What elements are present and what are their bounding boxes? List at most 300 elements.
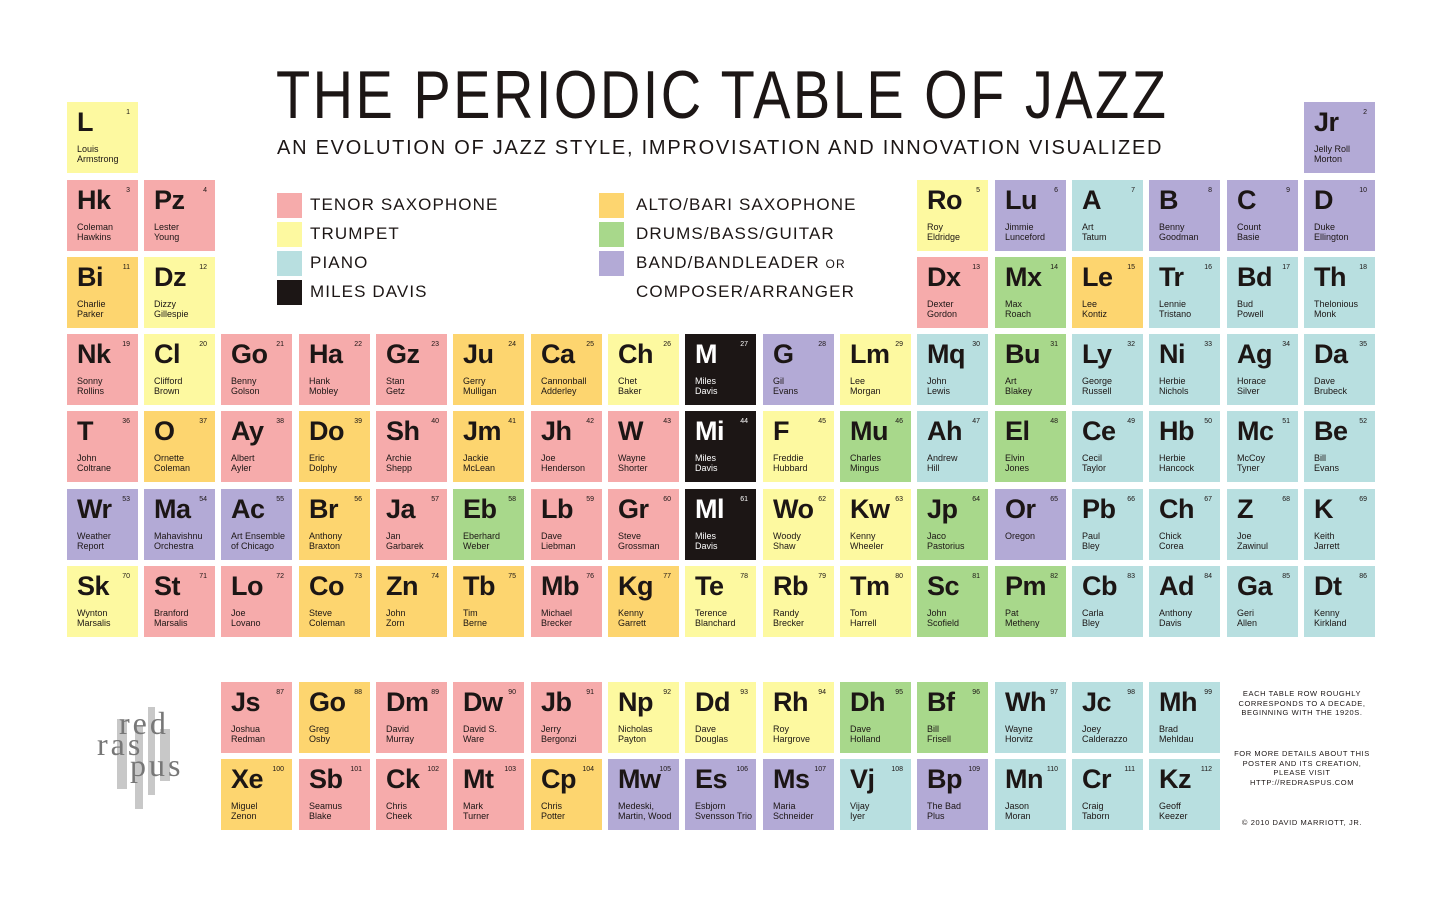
periodic table: Osby xyxy=(309,734,330,744)
periodic table: Clifford xyxy=(154,376,182,386)
periodic table: Sonny xyxy=(77,376,103,386)
periodic table: 37 xyxy=(199,418,207,425)
periodic table: 19 xyxy=(122,341,130,348)
periodic table: W xyxy=(618,416,643,446)
periodic table: Craig xyxy=(1082,801,1104,811)
periodic table: Mw xyxy=(618,764,660,794)
periodic table: 65 xyxy=(1050,496,1058,503)
periodic table: 85 xyxy=(1282,573,1290,580)
periodic table: Benny xyxy=(1159,222,1185,232)
periodic table: Mark xyxy=(463,801,483,811)
periodic table: Elvin xyxy=(1005,453,1025,463)
periodic table: 71 xyxy=(199,573,207,580)
periodic table: Mobley xyxy=(309,386,338,396)
periodic table: Herbie xyxy=(1159,453,1186,463)
periodic table: Steve xyxy=(618,531,641,541)
periodic table: Marsalis xyxy=(77,618,111,628)
periodic table: Esbjorn xyxy=(695,801,726,811)
periodic table: Lewis xyxy=(927,386,950,396)
periodic table: 14 xyxy=(1050,264,1058,271)
periodic table: Calderazzo xyxy=(1082,734,1128,744)
periodic table: Dave xyxy=(1314,376,1335,386)
periodic table: Tr xyxy=(1159,262,1184,292)
periodic table: 41 xyxy=(508,418,516,425)
periodic table: Le xyxy=(1082,262,1113,292)
periodic table: Ay xyxy=(231,416,264,446)
periodic table: Andrew xyxy=(927,453,958,463)
periodic table: of Chicago xyxy=(231,541,274,551)
periodic table: Dave xyxy=(850,724,871,734)
periodic table: Goodman xyxy=(1159,232,1199,242)
legend: ALTO/BARI SAXOPHONE xyxy=(636,195,857,214)
periodic table: 92 xyxy=(663,689,671,696)
periodic table: 6 xyxy=(1054,187,1058,194)
periodic table: Chet xyxy=(618,376,637,386)
periodic table: Th xyxy=(1314,262,1346,292)
periodic table: Stan xyxy=(386,376,405,386)
periodic table: 49 xyxy=(1127,418,1135,425)
periodic table: 106 xyxy=(736,766,748,773)
periodic table: Coltrane xyxy=(77,463,111,473)
periodic table: 70 xyxy=(122,573,130,580)
periodic table: 8 xyxy=(1208,187,1212,194)
periodic table: Art xyxy=(1005,376,1017,386)
periodic table: 75 xyxy=(508,573,516,580)
periodic table: 53 xyxy=(122,496,130,503)
periodic table: Sh xyxy=(386,416,420,446)
periodic table: 26 xyxy=(663,341,671,348)
periodic table: Morton xyxy=(1314,154,1342,164)
periodic table: Tyner xyxy=(1237,463,1260,473)
periodic table: Dexter xyxy=(927,299,954,309)
periodic table: Cannonball xyxy=(541,376,587,386)
note: decades: EACH TABLE ROW ROUGHLY CORRESPONDS TO A DECADE, BEGINNING WITH THE 1920S. xyxy=(1238,689,1366,717)
periodic table: Ml xyxy=(695,494,724,524)
periodic table: Dw xyxy=(463,687,502,717)
periodic table: Gz xyxy=(386,339,420,369)
periodic table: Jaco xyxy=(927,531,946,541)
periodic table: Do xyxy=(309,416,344,446)
periodic table: John xyxy=(927,376,947,386)
periodic table: Moran xyxy=(1005,811,1031,821)
periodic table: Tm xyxy=(850,571,890,601)
periodic table: 39 xyxy=(354,418,362,425)
periodic table: G xyxy=(773,339,794,369)
periodic table: 45 xyxy=(818,418,826,425)
periodic table: Herbie xyxy=(1159,376,1186,386)
periodic table: 89 xyxy=(431,689,439,696)
periodic table: 82 xyxy=(1050,573,1058,580)
periodic table: Jimmie xyxy=(1005,222,1034,232)
periodic table: Hubbard xyxy=(773,463,808,473)
periodic table: Mingus xyxy=(850,463,879,473)
periodic table: Br xyxy=(309,494,338,524)
periodic table: Joe xyxy=(1237,531,1252,541)
periodic table: 111 xyxy=(1124,766,1135,773)
periodic table: Brown xyxy=(154,386,180,396)
periodic table: O xyxy=(154,416,175,446)
periodic table: Liebman xyxy=(541,541,576,551)
periodic table: 1 xyxy=(126,109,130,116)
periodic table: Mx xyxy=(1005,262,1042,292)
periodic table: Shepp xyxy=(386,463,412,473)
periodic table: Hargrove xyxy=(773,734,810,744)
periodic table: Geoff xyxy=(1159,801,1181,811)
periodic table: 48 xyxy=(1050,418,1058,425)
periodic table: McCoy xyxy=(1237,453,1265,463)
periodic table: 90 xyxy=(508,689,516,696)
periodic table: Miles xyxy=(695,453,716,463)
periodic table: Randy xyxy=(773,608,799,618)
periodic table: Armstrong xyxy=(77,154,119,164)
periodic table: Lm xyxy=(850,339,890,369)
periodic table: 57 xyxy=(431,496,439,503)
periodic table: 15 xyxy=(1127,264,1135,271)
periodic table: Tom xyxy=(850,608,867,618)
periodic table: Jm xyxy=(463,416,501,446)
periodic table: Hancock xyxy=(1159,463,1194,473)
periodic table: Rb xyxy=(773,571,808,601)
periodic table: 11 xyxy=(123,264,130,271)
periodic table: Dt xyxy=(1314,571,1342,601)
periodic table: 38 xyxy=(276,418,284,425)
legend: COMPOSER/ARRANGER xyxy=(636,282,855,301)
periodic table: Ch xyxy=(1159,494,1194,524)
periodic table: Jc xyxy=(1082,687,1111,717)
periodic table: Basie xyxy=(1237,232,1260,242)
periodic table: Wr xyxy=(77,494,112,524)
periodic table: 96 xyxy=(972,689,980,696)
periodic table: Baker xyxy=(618,386,642,396)
periodic table: Da xyxy=(1314,339,1348,369)
periodic table: 88 xyxy=(354,689,362,696)
periodic table: 84 xyxy=(1204,573,1212,580)
periodic table: 33 xyxy=(1204,341,1212,348)
periodic table: Joey xyxy=(1082,724,1101,734)
periodic table: Monk xyxy=(1314,309,1336,319)
periodic table: Miles xyxy=(695,531,716,541)
periodic table: 60 xyxy=(663,496,671,503)
periodic table: Lunceford xyxy=(1005,232,1045,242)
periodic table: Harrell xyxy=(850,618,877,628)
periodic table: Chick xyxy=(1159,531,1182,541)
periodic table: 31 xyxy=(1050,341,1058,348)
periodic table: Joe xyxy=(231,608,246,618)
periodic table: Davis xyxy=(695,541,718,551)
periodic table: Tatum xyxy=(1082,232,1107,242)
periodic table: Seamus xyxy=(309,801,342,811)
periodic table: Taylor xyxy=(1082,463,1106,473)
periodic table: Svensson Trio xyxy=(695,811,752,821)
periodic table: Dm xyxy=(386,687,429,717)
periodic table: Ware xyxy=(463,734,484,744)
periodic table: Michael xyxy=(541,608,572,618)
periodic table: Lb xyxy=(541,494,573,524)
periodic table: 58 xyxy=(508,496,516,503)
periodic table: Mi xyxy=(695,416,724,446)
periodic table: Or xyxy=(1005,494,1036,524)
periodic table: Zenon xyxy=(231,811,257,821)
periodic table: Greg xyxy=(309,724,329,734)
periodic table: Rollins xyxy=(77,386,104,396)
periodic table: T xyxy=(77,416,93,446)
periodic table: Jackie xyxy=(463,453,489,463)
periodic table: 32 xyxy=(1127,341,1135,348)
periodic table: Ga xyxy=(1237,571,1272,601)
periodic table: Dave xyxy=(541,531,562,541)
periodic table: 40 xyxy=(431,418,439,425)
periodic table: Lee xyxy=(850,376,865,386)
periodic table: Hawkins xyxy=(77,232,111,242)
periodic table: Es xyxy=(695,764,727,794)
periodic table: 29 xyxy=(895,341,903,348)
periodic table: Ch xyxy=(618,339,653,369)
periodic table: Tb xyxy=(463,571,495,601)
periodic table: Russell xyxy=(1082,386,1112,396)
periodic table: 95 xyxy=(895,689,903,696)
periodic table: Dx xyxy=(927,262,961,292)
periodic table: Pb xyxy=(1082,494,1116,524)
periodic table: Powell xyxy=(1237,309,1264,319)
periodic table: Ad xyxy=(1159,571,1194,601)
legend xyxy=(277,193,857,305)
periodic table: 42 xyxy=(586,418,594,425)
title: THE PERIODIC TABLE OF JAZZ xyxy=(276,57,1168,133)
periodic table: Archie xyxy=(386,453,412,463)
periodic table: 5 xyxy=(976,187,980,194)
periodic table: Horace xyxy=(1237,376,1266,386)
periodic table: 59 xyxy=(586,496,594,503)
periodic table: 25 xyxy=(586,341,594,348)
periodic table: Ma xyxy=(154,494,191,524)
periodic table: Jh xyxy=(541,416,572,446)
periodic table: 34 xyxy=(1282,341,1290,348)
periodic table: 24 xyxy=(508,341,516,348)
periodic table: F xyxy=(773,416,789,446)
periodic table: Gordon xyxy=(927,309,957,319)
periodic table: Marsalis xyxy=(154,618,188,628)
periodic table: Jason xyxy=(1005,801,1029,811)
periodic table: 93 xyxy=(740,689,748,696)
periodic table: Bp xyxy=(927,764,962,794)
periodic table: Jan xyxy=(386,531,401,541)
periodic table: 46 xyxy=(895,418,903,425)
periodic table: 107 xyxy=(814,766,826,773)
periodic table: Be xyxy=(1314,416,1348,446)
periodic table: Lu xyxy=(1005,185,1037,215)
periodic table: Zawinul xyxy=(1237,541,1268,551)
periodic table: Horvitz xyxy=(1005,734,1033,744)
periodic table: Joe xyxy=(541,453,556,463)
periodic table: Miguel xyxy=(231,801,258,811)
periodic table: 86 xyxy=(1359,573,1367,580)
periodic table: Bd xyxy=(1237,262,1272,292)
periodic table: Np xyxy=(618,687,653,717)
periodic table: 56 xyxy=(354,496,362,503)
periodic table: Shaw xyxy=(773,541,796,551)
periodic table: Report xyxy=(77,541,104,551)
periodic table: Lennie xyxy=(1159,299,1186,309)
periodic table: 21 xyxy=(276,341,284,348)
periodic table: 7 xyxy=(1131,187,1135,194)
periodic table: Count xyxy=(1237,222,1261,232)
periodic table: Rh xyxy=(773,687,808,717)
periodic table: Ly xyxy=(1082,339,1112,369)
periodic table: Charlie xyxy=(77,299,106,309)
periodic table: Jb xyxy=(541,687,572,717)
periodic table: Gr xyxy=(618,494,649,524)
periodic table: 13 xyxy=(972,264,980,271)
periodic table: 30 xyxy=(972,341,980,348)
periodic table: 101 xyxy=(350,766,362,773)
periodic table: Zorn xyxy=(386,618,405,628)
periodic table: 2 xyxy=(1363,109,1367,116)
periodic table: 110 xyxy=(1047,766,1058,773)
periodic table: Art Ensemble xyxy=(231,531,285,541)
periodic table: Wh xyxy=(1005,687,1046,717)
periodic table: Jarrett xyxy=(1314,541,1340,551)
periodic table: Mn xyxy=(1005,764,1043,794)
periodic table: 112 xyxy=(1201,766,1212,773)
periodic table: Ca xyxy=(541,339,575,369)
periodic table: Vijay xyxy=(850,801,869,811)
periodic table: Freddie xyxy=(773,453,804,463)
periodic table: Mh xyxy=(1159,687,1197,717)
periodic table: Golson xyxy=(231,386,260,396)
periodic table: Ni xyxy=(1159,339,1185,369)
periodic table: Ju xyxy=(463,339,494,369)
periodic table: Payton xyxy=(618,734,646,744)
periodic table: 10 xyxy=(1359,187,1367,194)
periodic table: Anthony xyxy=(309,531,342,541)
periodic table: Tim xyxy=(463,608,478,618)
subtitle: AN EVOLUTION OF JAZZ STYLE, IMPROVISATION AND INNOVATION VISUALIZED xyxy=(277,137,1163,159)
periodic table: Cp xyxy=(541,764,576,794)
periodic table: Js xyxy=(231,687,260,717)
periodic table: 77 xyxy=(663,573,671,580)
legend: TRUMPET xyxy=(310,224,400,243)
legend: PIANO xyxy=(310,253,368,272)
periodic table: Ms xyxy=(773,764,810,794)
periodic table: Davis xyxy=(695,386,718,396)
periodic table: Getz xyxy=(386,386,405,396)
periodic table: Louis xyxy=(77,144,99,154)
periodic table: Murray xyxy=(386,734,414,744)
periodic table: Hb xyxy=(1159,416,1194,446)
periodic table: Orchestra xyxy=(154,541,194,551)
periodic table: 78 xyxy=(740,573,748,580)
periodic table: Jr xyxy=(1314,107,1339,137)
periodic table: Chris xyxy=(541,801,562,811)
periodic table: Bill xyxy=(1314,453,1326,463)
periodic table: Geri xyxy=(1237,608,1254,618)
periodic table: Blanchard xyxy=(695,618,736,628)
periodic table: Cl xyxy=(154,339,180,369)
periodic table: Paul xyxy=(1082,531,1100,541)
periodic table: 68 xyxy=(1282,496,1290,503)
periodic table: Kg xyxy=(618,571,653,601)
note: details: FOR MORE DETAILS ABOUT THIS POSTER AND ITS CREATION, PLEASE VISIT HTTP://REDRASPUS.COM xyxy=(1234,749,1370,786)
periodic table: Kirkland xyxy=(1314,618,1347,628)
periodic table: Pat xyxy=(1005,608,1019,618)
periodic table: Jp xyxy=(927,494,958,524)
periodic table: Weber xyxy=(463,541,489,551)
periodic table: Roy xyxy=(773,724,789,734)
periodic table: Davis xyxy=(695,463,718,473)
periodic table: Thelonious xyxy=(1314,299,1358,309)
periodic table: Pz xyxy=(154,185,185,215)
periodic table: 12 xyxy=(199,264,207,271)
periodic table: Eberhard xyxy=(463,531,500,541)
periodic table: 4 xyxy=(203,187,207,194)
periodic table: 69 xyxy=(1359,496,1367,503)
periodic table: Vj xyxy=(850,764,875,794)
periodic table: Grossman xyxy=(618,541,660,551)
periodic table: John xyxy=(927,608,947,618)
periodic table: Dave xyxy=(695,724,716,734)
periodic table: B xyxy=(1159,185,1178,215)
periodic table: Dolphy xyxy=(309,463,337,473)
periodic table: Gil xyxy=(773,376,784,386)
periodic table: 54 xyxy=(199,496,207,503)
periodic table: Eb xyxy=(463,494,497,524)
periodic table: 55 xyxy=(276,496,284,503)
periodic table: Joshua xyxy=(231,724,260,734)
periodic table: Adderley xyxy=(541,386,577,396)
periodic table: Brad xyxy=(1159,724,1178,734)
periodic table: Wayne xyxy=(618,453,646,463)
periodic table: Shorter xyxy=(618,463,648,473)
periodic table: Duke xyxy=(1314,222,1335,232)
periodic table: 18 xyxy=(1359,264,1367,271)
periodic table: Ac xyxy=(231,494,265,524)
periodic table: Sk xyxy=(77,571,109,601)
periodic table: 99 xyxy=(1204,689,1212,696)
periodic table: Kenny xyxy=(618,608,644,618)
periodic table: Zn xyxy=(386,571,418,601)
periodic table: 73 xyxy=(354,573,362,580)
periodic table: Miles xyxy=(695,376,716,386)
periodic table: Nichols xyxy=(1159,386,1189,396)
periodic table: 62 xyxy=(818,496,826,503)
periodic table: Coleman xyxy=(309,618,345,628)
periodic table: Corea xyxy=(1159,541,1184,551)
periodic table: Bu xyxy=(1005,339,1040,369)
periodic table: 22 xyxy=(354,341,362,348)
periodic table: Redman xyxy=(231,734,265,744)
periodic table: C xyxy=(1237,185,1256,215)
periodic table: Ellington xyxy=(1314,232,1349,242)
periodic table: Lee xyxy=(1082,299,1097,309)
periodic table: L xyxy=(77,107,93,137)
periodic table: Coleman xyxy=(154,463,190,473)
periodic table: Mq xyxy=(927,339,965,369)
periodic table: Wayne xyxy=(1005,724,1033,734)
periodic table: 83 xyxy=(1127,573,1135,580)
periodic table: Dizzy xyxy=(154,299,176,309)
periodic table: Mc xyxy=(1237,416,1274,446)
periodic table: 28 xyxy=(818,341,826,348)
periodic table: Benny xyxy=(231,376,257,386)
periodic table: George xyxy=(1082,376,1112,386)
periodic table: The Bad xyxy=(927,801,961,811)
periodic table: Chris xyxy=(386,801,407,811)
legend: TENOR SAXOPHONE xyxy=(310,195,498,214)
periodic table: Kw xyxy=(850,494,890,524)
periodic table: Lester xyxy=(154,222,179,232)
periodic table: David xyxy=(386,724,409,734)
periodic table: 102 xyxy=(427,766,439,773)
